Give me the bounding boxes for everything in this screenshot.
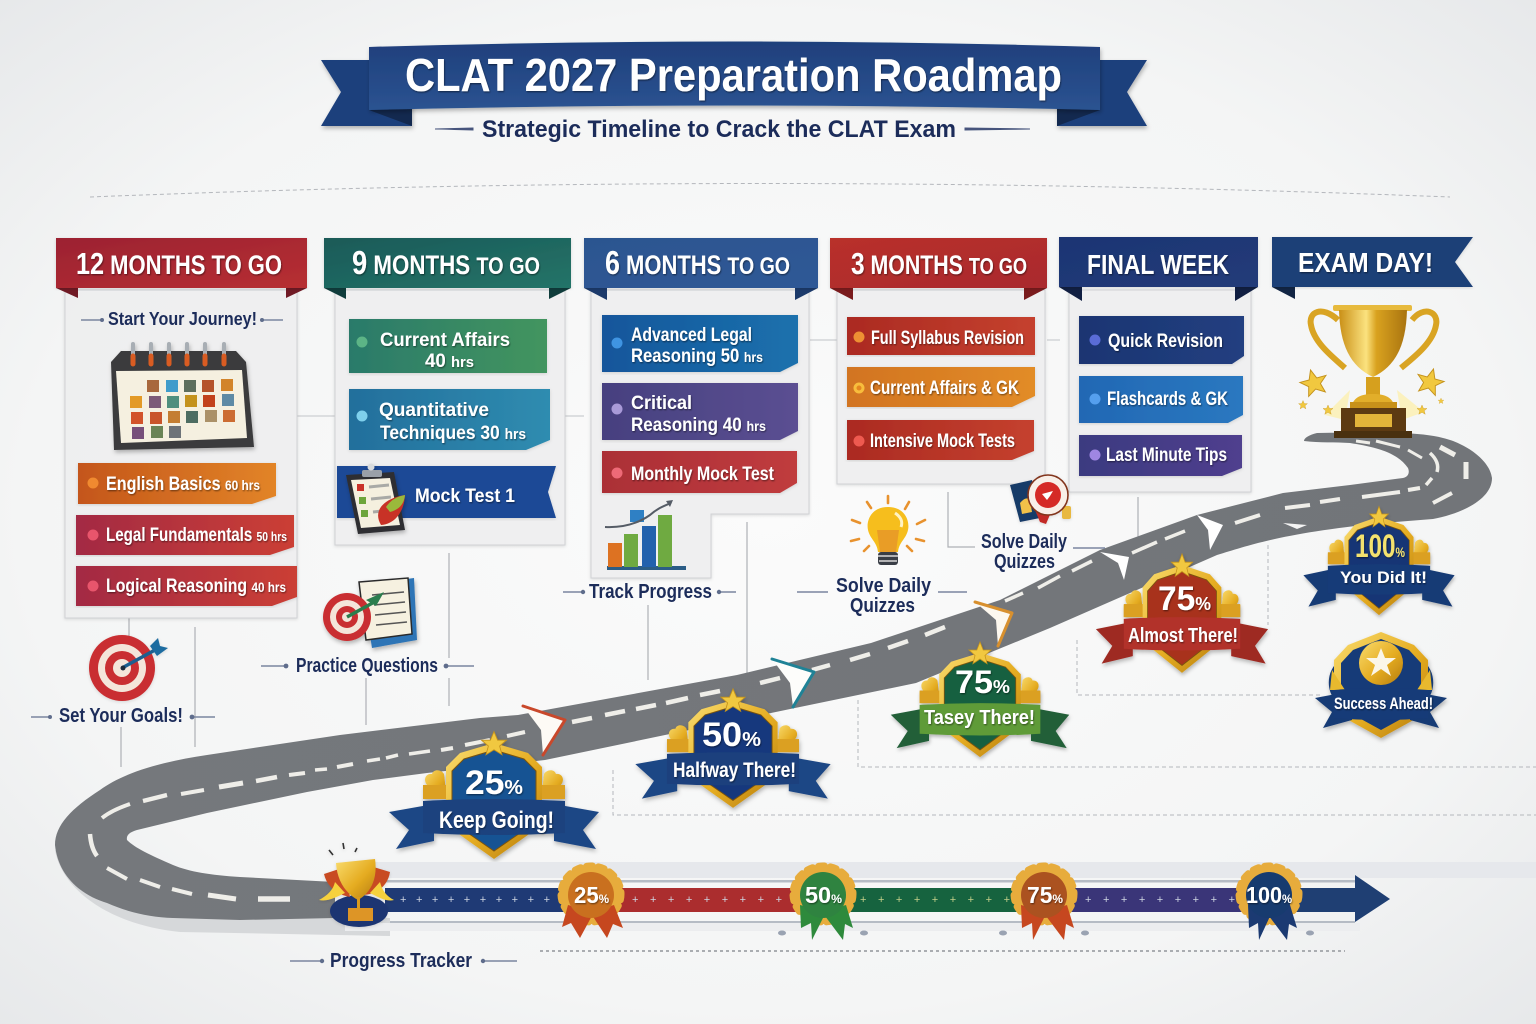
panel: 3 months to go [830, 238, 1047, 460]
progress arrow: + + + + + + + + + [860, 894, 1010, 906]
header: final week [1059, 237, 1258, 301]
badge: 25% keep going [389, 732, 599, 859]
item: Quantitative Techniques [349, 389, 550, 450]
badge: 75% almost there: 75% [1158, 580, 1211, 618]
badge: 75% green: Tasey There! [924, 707, 1035, 729]
badge: 50% halfway there: Halfway There! [673, 759, 796, 782]
banner folds [369, 108, 1100, 126]
item: Last Minute Tips: Last Minute Tips [1106, 445, 1227, 466]
item: Quick Revision [1079, 316, 1244, 364]
badge: 100% you did it: You Did It! [1340, 568, 1427, 587]
item: English Basics: English Basics 60 hrs [106, 474, 260, 495]
item: Monthly Mock Test [602, 451, 797, 493]
progress arrow: + + + + + + + + + [632, 894, 782, 906]
panel: 6 months to go [584, 238, 818, 570]
item: Current Affairs & GK: Current Affairs & GK [870, 378, 1019, 399]
rosette 25% [561, 866, 623, 938]
icon: trophy [1297, 305, 1447, 438]
item: Mock Test 1: Mock Test 1 [415, 486, 515, 507]
item: Advanced Legal Reasoning: Reasoning 50 hrs [631, 346, 763, 367]
item: Critical Reasoning: Critical [631, 393, 692, 414]
item: Current Affairs: 40 hrs [425, 351, 474, 372]
rosette 25%: 25% [574, 882, 609, 908]
badge: 25% keep going: Keep Going! [439, 807, 554, 834]
header: 6 months [584, 238, 818, 300]
header: final week: FINAL WEEK [1087, 249, 1229, 280]
icon: bar chart [605, 500, 686, 570]
caption: Progress Tracker: Progress Tracker [330, 950, 472, 972]
header: 12 months: 12 MONTHS TO GO [76, 246, 282, 281]
icon: target and notes [323, 578, 417, 648]
icon: light bulb [851, 496, 925, 565]
dashed guide frames [613, 545, 1536, 815]
header: exam day [1272, 237, 1473, 299]
rosette 50% [778, 866, 868, 940]
progress arrow: + + + + + + + + + [1085, 894, 1235, 906]
item: Quantitative Techniques: Techniques 30 hrs [380, 423, 526, 444]
progress arrow: + + + + + + + + + + [400, 894, 550, 906]
item: Flashcards & GK: Flashcards & GK [1107, 389, 1228, 410]
item: Quick Revision: Quick Revision [1108, 331, 1223, 352]
road edge shadow [55, 850, 390, 936]
caption: Solve Daily Quizzes (lower): Solve Daily [836, 575, 932, 597]
rosette 100%: 100% [1246, 882, 1292, 908]
item: Full Syllabus Revision [847, 317, 1035, 355]
caption: Solve Daily Quizzes (upper): Solve Daily [981, 531, 1068, 553]
icon: quiz medal [1010, 475, 1071, 524]
item: Intensive Mock Tests [847, 420, 1034, 460]
banner body [369, 42, 1100, 110]
caption: Solve Daily Quizzes (lower) [797, 575, 967, 617]
caption: Practice Questions: Practice Questions [296, 655, 438, 677]
item: Flashcards & GK [1079, 376, 1243, 423]
item: Advanced Legal Reasoning [602, 315, 798, 372]
icon: clipboard [346, 464, 405, 534]
header: 12 months [56, 238, 307, 298]
item: Mock Test 1 [337, 464, 556, 534]
item: Quantitative Techniques: Quantitative [379, 400, 489, 421]
header: 3 months [830, 238, 1047, 300]
thin connector lines [121, 340, 1138, 767]
header: 6 months: 6 MONTHS TO GO [605, 244, 790, 281]
rosette 100% [1239, 866, 1314, 940]
banner tails [321, 60, 1147, 126]
item: Intensive Mock Tests: Intensive Mock Tests [870, 431, 1015, 452]
progress tracker [290, 843, 1536, 972]
panel: 12 months to go [56, 238, 307, 606]
item: Last Minute Tips [1079, 435, 1242, 476]
header: 9 months: 9 MONTHS TO GO [352, 244, 540, 281]
item: Critical Reasoning [602, 383, 798, 440]
road [55, 433, 1492, 936]
badge: 25% keep going: 25% [465, 764, 523, 802]
item: Monthly Mock Test: Monthly Mock Test [631, 464, 775, 485]
header: exam day: EXAM DAY! [1298, 247, 1433, 278]
progress arrow [385, 875, 1390, 922]
badge: success ahead [1315, 632, 1447, 738]
top dotted arc [90, 184, 1450, 197]
road centre dashes [90, 441, 1466, 899]
badge: 50% halfway there [635, 689, 831, 808]
icon: start trophy [319, 843, 394, 927]
item: Legal Fundamentals: Legal Fundamentals 50 hrs [106, 525, 287, 546]
item: English Basics [78, 463, 276, 504]
road direction arrows [523, 515, 1307, 755]
item: Full Syllabus Revision: Full Syllabus Revision [871, 328, 1024, 349]
tracker background band [345, 862, 1536, 931]
subtitle: Strategic Timeline to Crack the CLAT Exam [482, 116, 956, 143]
badge: success ahead: Success Ahead! [1334, 694, 1433, 713]
title banner [321, 42, 1147, 126]
item: Logical Reasoning [76, 566, 297, 606]
header: 3 months: 3 MONTHS TO GO [851, 246, 1027, 281]
panel frames [65, 290, 1251, 618]
panel: final week [1059, 237, 1258, 476]
badge: 75% green [891, 642, 1069, 757]
icon: calendar [111, 344, 254, 450]
rosette 75%: 75% [1027, 882, 1063, 908]
caption: Track Progress: Track Progress [589, 581, 712, 603]
caption: Solve Daily Quizzes (lower): Quizzes [850, 595, 915, 617]
item: Advanced Legal Reasoning: Advanced Legal [631, 325, 752, 346]
item: Current Affairs: Current Affairs [380, 330, 510, 351]
panel: exam day [1272, 237, 1473, 438]
header: 9 months [324, 238, 571, 299]
title text: CLAT 2027 Preparation Roadmap [405, 49, 1062, 101]
caption: Set Your Goals: Set Your Goals! [59, 705, 183, 727]
badge: 75% green: 75% [955, 664, 1010, 700]
badge: 100% you did it: 100% [1355, 528, 1405, 564]
caption: Solve Daily Quizzes (upper) [981, 531, 1105, 573]
panel: 9 months to go [324, 238, 571, 534]
item: Legal Fundamentals [76, 515, 294, 555]
sub heading: Start Your Journey! [108, 308, 257, 329]
badge: 50% halfway there: 50% [702, 716, 761, 754]
item: Current Affairs [349, 319, 547, 373]
rosette 75% [999, 866, 1089, 940]
caption: Solve Daily Quizzes (upper): Quizzes [994, 551, 1055, 573]
badge: 75% almost there: Almost There! [1128, 624, 1238, 647]
item: Current Affairs & GK [847, 367, 1035, 407]
badge: 75% almost there [1096, 554, 1268, 673]
road surface [55, 433, 1492, 920]
item: Logical Reasoning: Logical Reasoning 40 hrs [106, 576, 286, 597]
dotted baseline [540, 950, 1345, 952]
item: Critical Reasoning: Reasoning 40 hrs [631, 415, 766, 436]
badge: 100% you did it [1303, 506, 1455, 615]
rosette 50%: 50% [805, 882, 842, 908]
icon: target with dart [89, 635, 168, 701]
